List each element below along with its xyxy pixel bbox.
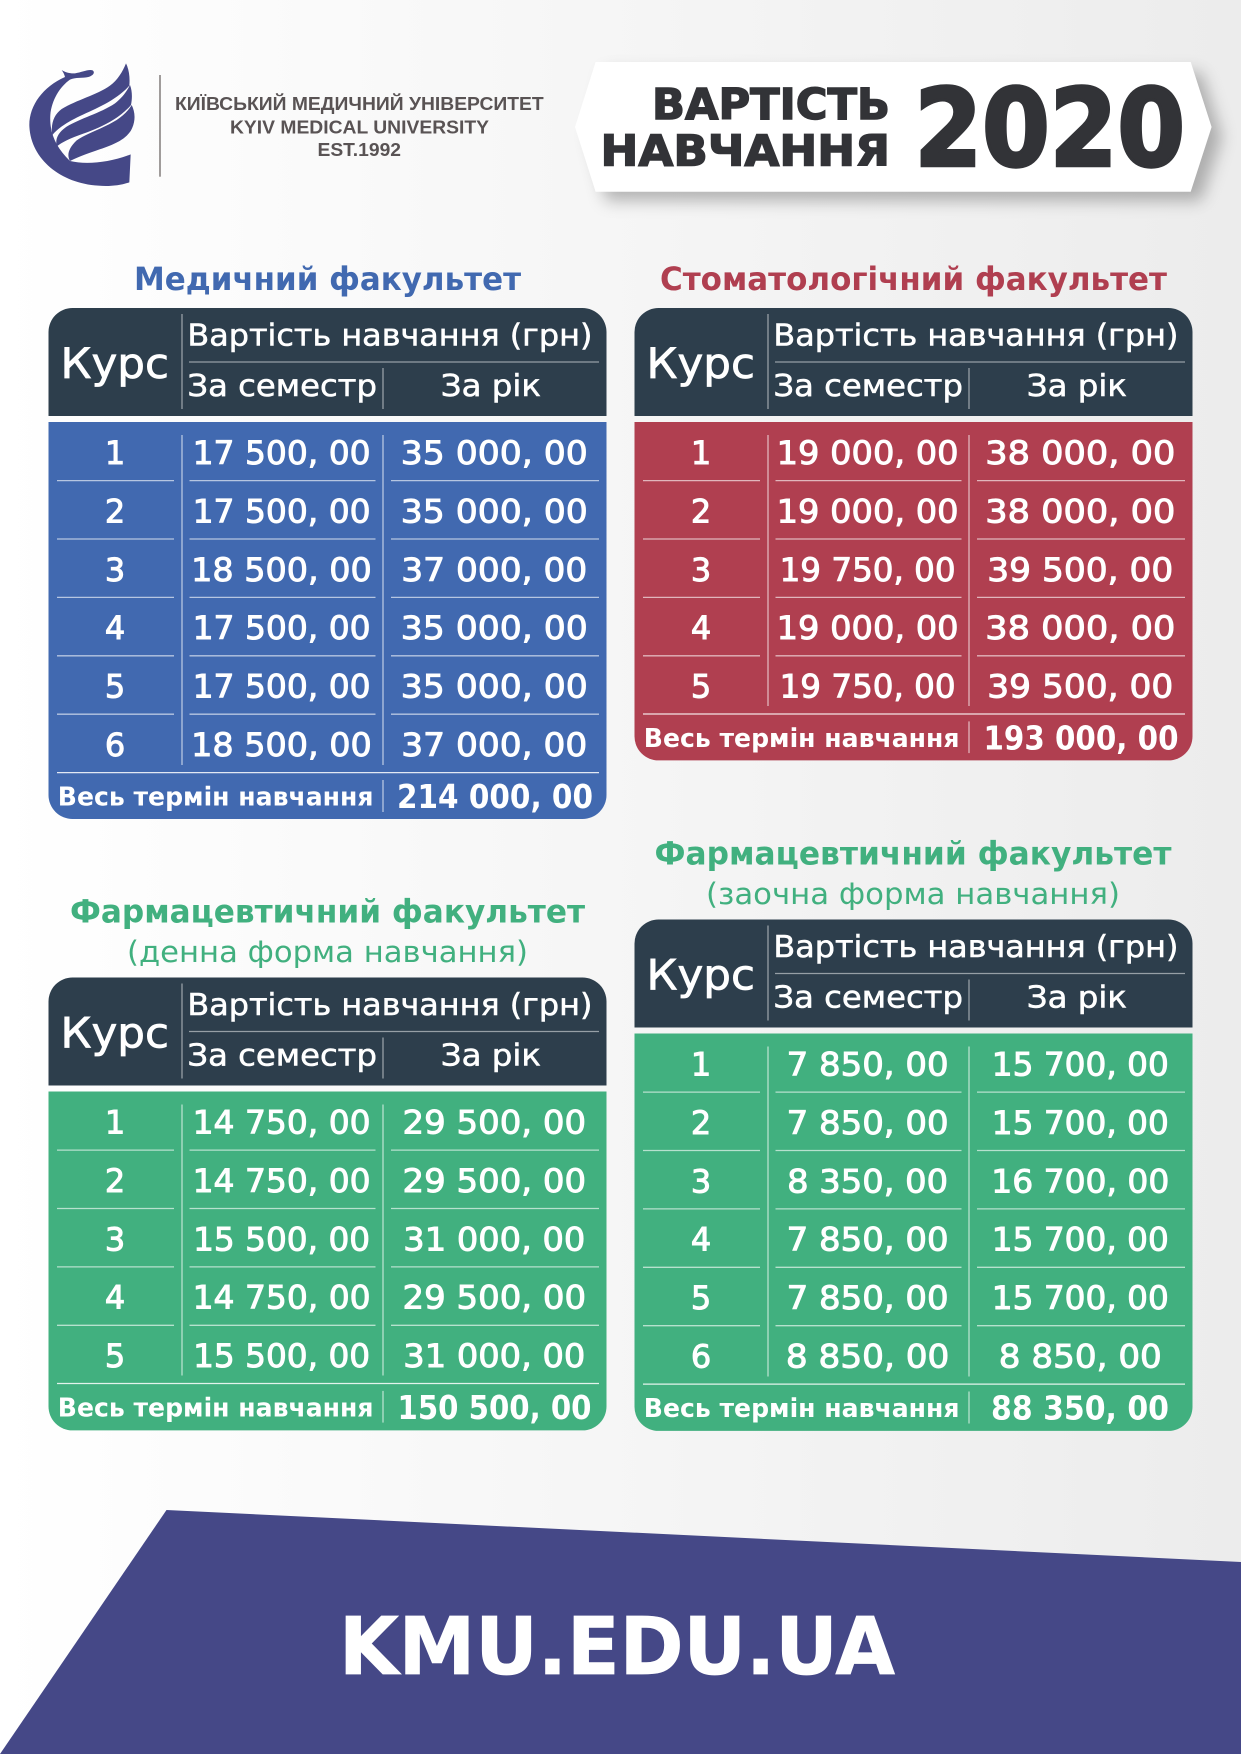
row 2: 14 750, 00 [193,1162,371,1200]
row 3: 3 [691,551,711,589]
row 2: 7 850, 00 [787,1104,949,1142]
row 6 [691,1338,1162,1376]
row 3: 16 700, 00 [991,1162,1169,1200]
total row: 214 000, 00 [397,777,593,816]
row 2: 2 [105,492,125,530]
row 4: 4 [691,1221,711,1259]
row 2 [691,492,1175,530]
row 1 [691,434,1175,472]
row 5 [691,1279,1169,1317]
total row: 88 350, 00 [991,1388,1169,1428]
row 4: 4 [105,1279,125,1317]
row 2: 2 [691,1104,711,1142]
total row: Весь термін навчання [644,724,960,754]
title banner [575,62,1222,201]
divider [159,75,161,177]
row 2: 29 500, 00 [403,1162,586,1200]
total row [58,777,593,816]
banner shadow [590,72,1222,201]
row 2: 2 [691,492,711,530]
row 5: 5 [105,668,125,706]
table header [634,308,1192,416]
row 5: 5 [691,668,711,706]
total row: Весь термін навчання [58,783,374,813]
row 5 [691,668,1173,706]
row 4: 4 [105,609,125,647]
table body [634,422,1192,760]
row 1 [105,434,588,472]
row 2: 17 500, 00 [193,492,371,530]
university name: КИЇВСЬКИЙ МЕДИЧНИЙ УНІВЕРСИТЕТ [175,93,544,114]
row 3: 3 [105,1220,125,1258]
heading: medical faculty: Медичний факультет [134,260,521,298]
row 3: 37 000, 00 [401,551,587,589]
row 3: 31 000, 00 [403,1220,585,1258]
banner heading: ВАРТІСТЬ [652,80,890,130]
row 1 [105,1104,586,1142]
row 3: 8 350, 00 [787,1162,948,1200]
total row: Весь термін навчання [58,1394,374,1424]
row 2: 2 [105,1162,125,1200]
row 3: 39 500, 00 [987,551,1173,589]
row 6: 8 850, 00 [786,1338,949,1376]
row 3 [105,1220,585,1258]
row 2: 38 000, 00 [985,492,1175,530]
row 2 [691,1104,1169,1142]
university name: KYIV MEDICAL UNIVERSITY [230,116,490,137]
row 2: 35 000, 00 [401,492,588,530]
banner shape [575,62,1212,192]
total row [644,718,1178,757]
table header [48,978,606,1086]
banner heading: НАВЧАННЯ [600,127,890,177]
row 6: 37 000, 00 [401,726,587,764]
row 1: 15 700, 00 [992,1046,1169,1084]
university name [175,93,544,160]
row 1: 14 750, 00 [193,1104,371,1142]
table header [634,920,1192,1028]
row 4 [105,609,588,647]
row 3 [691,551,1173,589]
panel: dentistry faculty [634,260,1192,760]
row 5: 5 [691,1279,711,1317]
row 6: 6 [105,726,125,764]
row 4 [691,609,1175,647]
footer band [0,1510,1241,1754]
row 5: 17 500, 00 [193,668,371,706]
total row [644,1388,1169,1428]
row 3: 3 [105,551,125,589]
total row: 150 500, 00 [398,1388,592,1427]
year 2020: 2020 [914,68,1185,192]
row 4: 17 500, 00 [193,609,371,647]
row 5: 31 000, 00 [403,1337,585,1375]
row 4: 29 500, 00 [403,1279,586,1317]
row 4: 19 000, 00 [777,609,959,647]
row 6: 18 500, 00 [191,726,372,764]
row 1: 1 [691,1046,711,1084]
row 1: 38 000, 00 [985,434,1175,472]
row 3 [105,551,587,589]
row 2: 19 000, 00 [777,492,959,530]
heading: dentistry faculty: Стоматологічний факультет [660,260,1167,298]
row 1: 19 000, 00 [777,434,959,472]
table body [48,422,606,819]
heading: pharmacy faculty: Фармацевтичний факультет [654,834,1172,872]
row 4 [691,1221,1169,1259]
table body [634,1034,1192,1431]
row 3: 18 500, 00 [191,551,372,589]
row 5: 5 [105,1337,125,1375]
total row: 193 000, 00 [984,718,1178,757]
row 5 [105,1337,585,1375]
banner heading [600,80,890,177]
row 6 [105,726,587,764]
subheading: full-time: (денна форма навчання) [127,935,528,969]
row 4: 14 750, 00 [193,1279,371,1317]
row 4: 15 700, 00 [992,1221,1169,1259]
row 4: 4 [691,609,711,647]
row 1: 35 000, 00 [401,434,588,472]
row 5: 39 500, 00 [987,668,1173,706]
row 2: 15 700, 00 [992,1104,1169,1142]
row 4: 35 000, 00 [401,609,588,647]
row 1: 7 850, 00 [787,1046,949,1084]
row 3: 15 500, 00 [193,1220,370,1258]
panel: pharmacy faculty part-time [634,834,1192,1431]
row 4: 38 000, 00 [985,609,1175,647]
row 1: 1 [105,434,125,472]
row 5: 7 850, 00 [787,1279,949,1317]
row 5: 35 000, 00 [401,668,588,706]
website address: KMU.EDU.UA [339,1601,895,1693]
row 1: 1 [691,434,711,472]
row 6: 6 [691,1338,711,1376]
row 3: 19 750, 00 [780,551,956,589]
row 4 [105,1279,586,1317]
row 2 [105,1162,586,1200]
subheading: part-time: (заочна форма навчання) [706,877,1120,911]
row 6: 8 850, 00 [999,1338,1162,1376]
row 1 [691,1046,1169,1084]
table body [48,1092,606,1430]
row 3: 3 [691,1162,711,1200]
row 1: 17 500, 00 [193,434,371,472]
row 5: 19 750, 00 [780,668,956,706]
total row: Весь термін навчання [644,1394,960,1424]
row 3 [691,1162,1169,1200]
panel: pharmacy faculty full-time [48,892,606,1430]
row 5: 15 500, 00 [193,1337,370,1375]
row 4: 7 850, 00 [787,1221,949,1259]
university name: EST.1992 [318,139,401,160]
row 5: 15 700, 00 [992,1279,1169,1317]
heading: pharmacy faculty: Фармацевтичний факультет [70,892,585,930]
row 5 [105,668,588,706]
total row [58,1388,592,1427]
row 1: 1 [105,1104,125,1142]
icon: university emblem [29,63,135,186]
university logo block [29,63,544,186]
row 2 [105,492,588,530]
row 1: 29 500, 00 [403,1104,586,1142]
panel: medical faculty [48,260,606,819]
table header [48,308,606,416]
